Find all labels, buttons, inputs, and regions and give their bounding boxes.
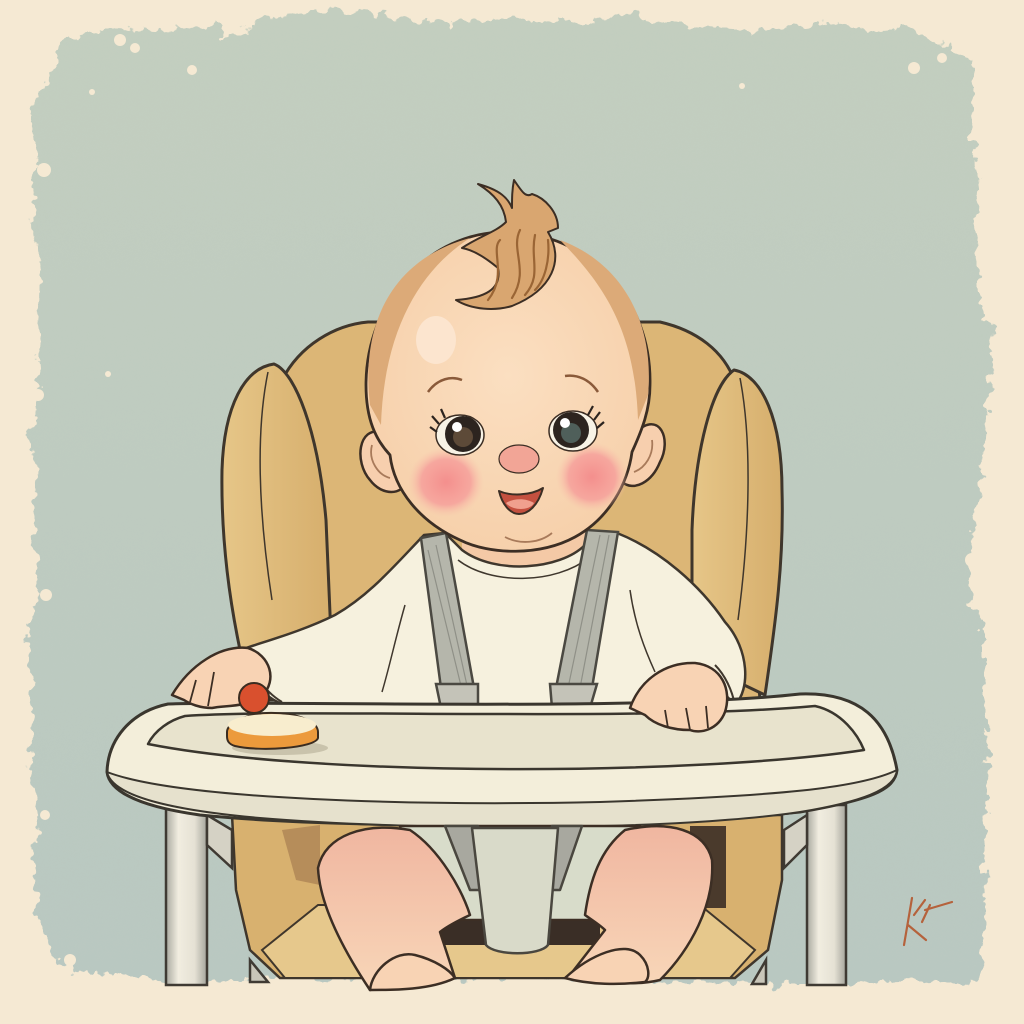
tray (107, 694, 897, 827)
eyes (436, 415, 484, 455)
crotch strap (445, 826, 582, 953)
baby right hand resting on tray (630, 663, 727, 731)
ears (360, 431, 408, 492)
baby left hand (172, 648, 270, 708)
lashes (430, 406, 604, 432)
chair backrest (222, 322, 782, 700)
face (366, 232, 650, 551)
high chair seat and lower back (232, 815, 782, 978)
hair curl (456, 180, 558, 309)
baby torso (245, 533, 745, 708)
left wing (222, 364, 332, 680)
baby head (360, 180, 665, 551)
cheeks (408, 447, 484, 517)
baby legs and feet (318, 826, 712, 990)
brows (428, 378, 462, 392)
nose (499, 445, 539, 473)
harness straps (421, 530, 618, 708)
artist signature (904, 898, 952, 945)
chair legs (166, 805, 846, 985)
right wing (692, 370, 782, 695)
mouth (499, 488, 543, 514)
hair shadow at the edges (368, 238, 470, 425)
baby neck (462, 530, 590, 582)
forehead highlight (416, 316, 456, 364)
food slice (227, 713, 328, 755)
red berry (239, 683, 269, 713)
